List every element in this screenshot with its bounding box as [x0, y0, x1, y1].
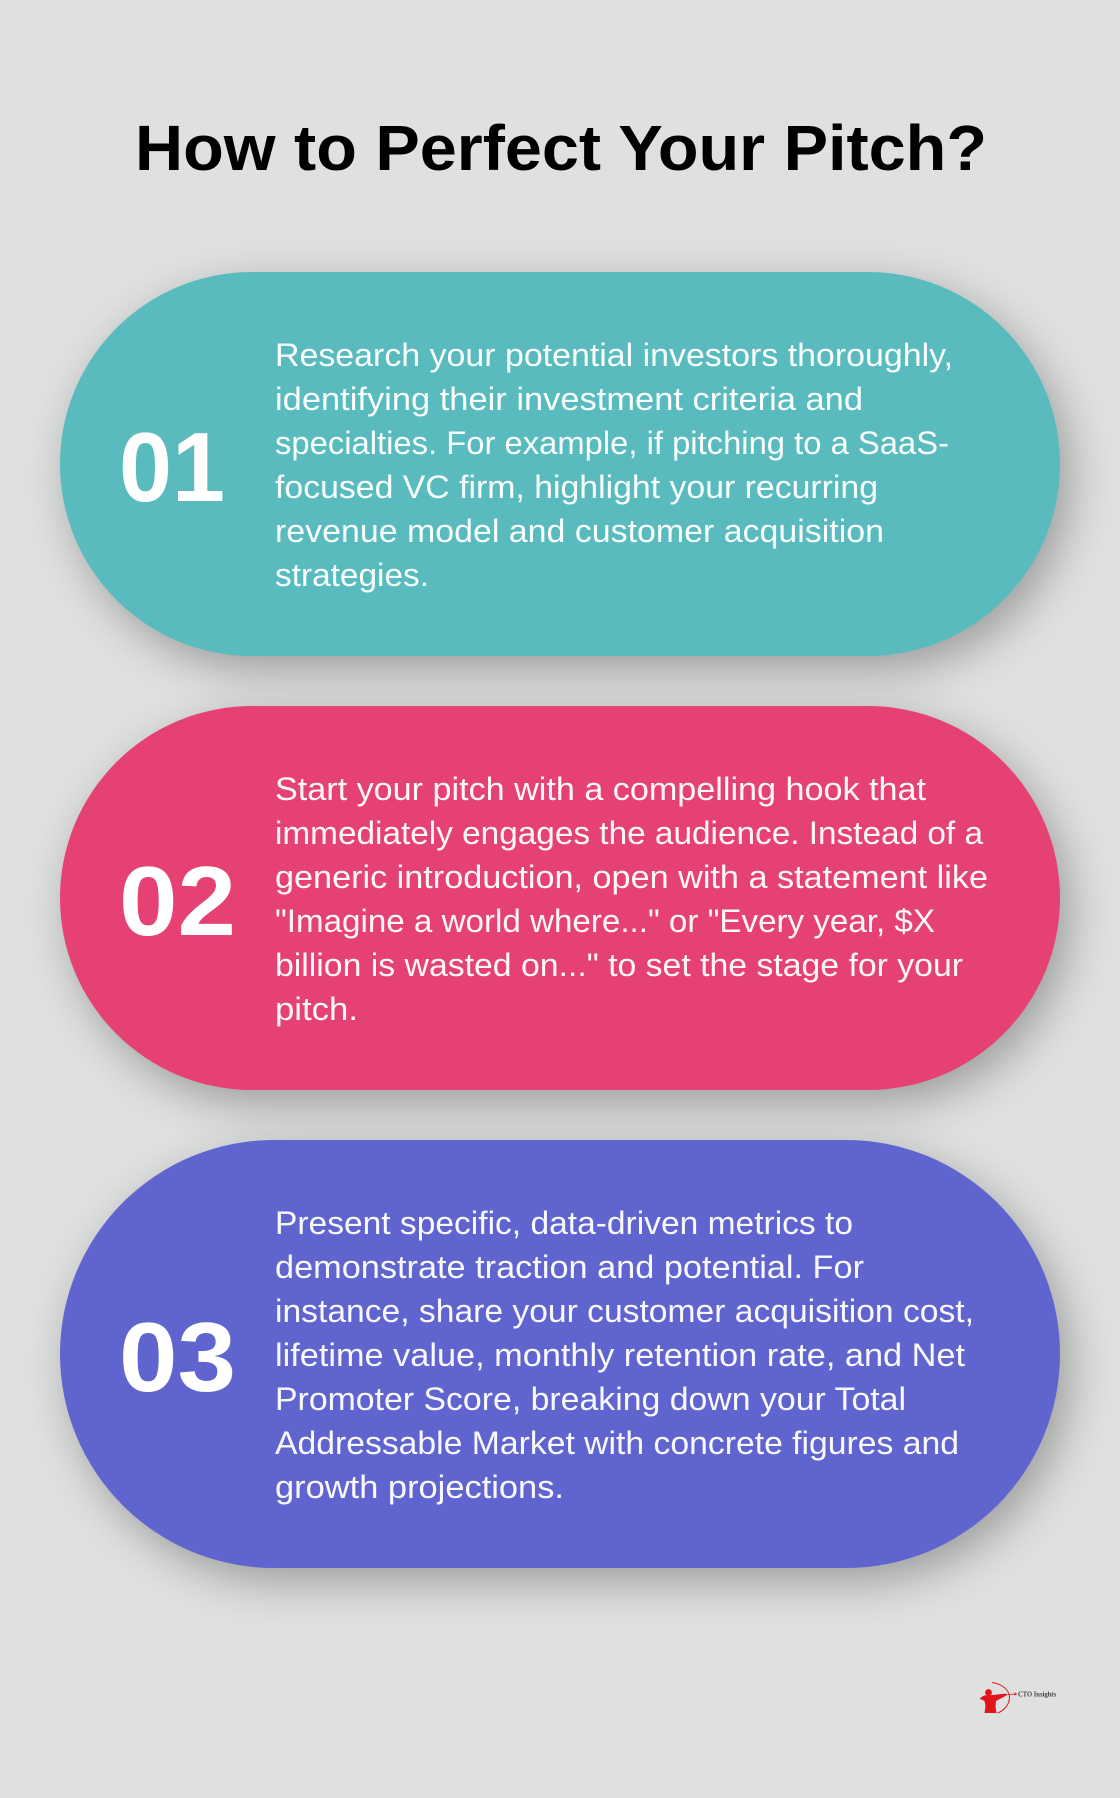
- logo text: CTO Insights: [1018, 1690, 1056, 1698]
- text: step 01 description: Research your potential investors thoroughly,: [275, 337, 953, 373]
- text: step 01 description: specialties. For example, if pitching to a SaaS-: [275, 425, 949, 461]
- number 03: 03: [119, 1302, 236, 1412]
- text: step 03 description: demonstrate traction and potential. For: [275, 1249, 864, 1285]
- text: step 01 description: revenue model and customer acquisition: [275, 513, 884, 549]
- text: step 02 description: [275, 771, 988, 1027]
- text: step 01 description: focused VC firm, highlight your recurring: [275, 469, 878, 505]
- text: step 01 description: strategies.: [275, 557, 429, 593]
- panel: step 03: [60, 1140, 1060, 1568]
- text: step 03 description: growth projections.: [275, 1469, 564, 1505]
- title: How to Perfect Your Pitch?: [135, 112, 987, 184]
- text: step 03 description: instance, share your customer acquisition cost,: [275, 1293, 974, 1329]
- text: step 02 description: generic introduction, open with a statement like: [275, 859, 988, 895]
- text: step 03 description: [275, 1205, 974, 1505]
- text: step 02 description: "Imagine a world where..." or "Every year, $X: [275, 903, 935, 939]
- text: step 02 description: billion is wasted on..." to set the stage for your: [275, 947, 963, 983]
- number 01: 01: [119, 412, 225, 522]
- text: step 03 description: lifetime value, monthly retention rate, and Net: [275, 1337, 965, 1373]
- text: step 03 description: Present specific, data-driven metrics to: [275, 1205, 853, 1241]
- text: step 02 description: pitch.: [275, 991, 358, 1027]
- panel: step 02: [60, 706, 1060, 1090]
- text: step 01 description: identifying their investment criteria and: [275, 381, 863, 417]
- text: step 02 description: Start your pitch with a compelling hook that: [275, 771, 926, 807]
- number 02: 02: [119, 846, 236, 956]
- text: step 02 description: immediately engages the audience. Instead of a: [275, 815, 984, 851]
- panel: step 01: [60, 272, 1060, 656]
- text: step 01 description: [275, 337, 953, 593]
- text: step 03 description: Promoter Score, breaking down your Total: [275, 1381, 906, 1417]
- icon: archer: [980, 1682, 1018, 1713]
- text: step 03 description: Addressable Market with concrete figures and: [275, 1425, 959, 1461]
- logo: CTO Insights archer: [980, 1682, 1056, 1714]
